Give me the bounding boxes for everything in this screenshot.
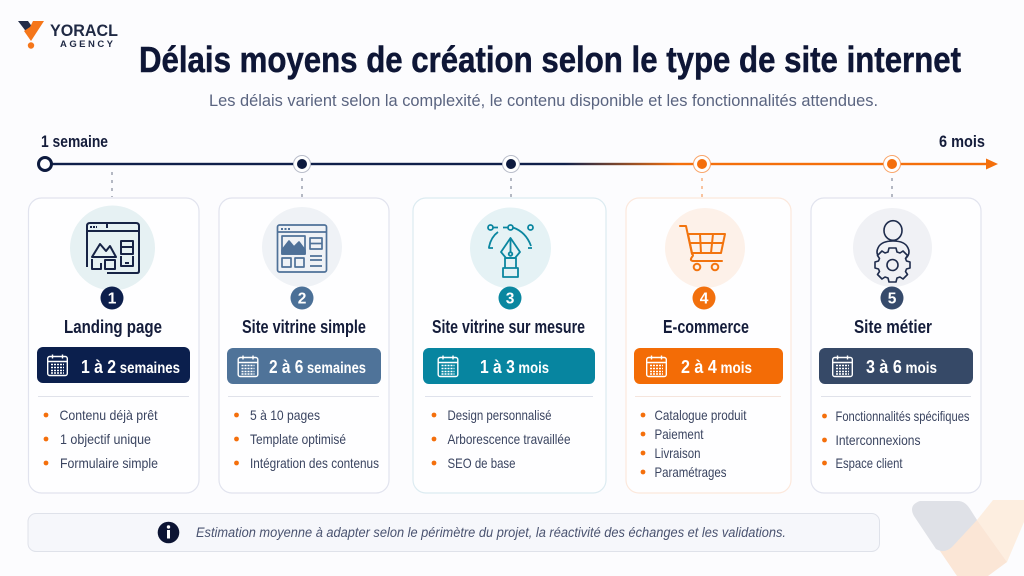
footer text: Estimation moyenne à adapter selon le périmètre du projet, la réactivité des échanges et les validations.	[196, 525, 786, 540]
timeline node 3	[502, 156, 520, 172]
logo: Yoracl Agency: AGENCY	[60, 39, 116, 50]
heading: site vitrine sur mesure: Site vitrine sur mesure	[432, 316, 585, 337]
icon: info	[158, 522, 179, 543]
timeline start label: 1 semaine	[41, 133, 108, 151]
feature list: 1 objectif unique	[60, 431, 151, 447]
feature list: Livraison	[654, 445, 700, 461]
subtitle: Les délais varient selon la complexité, le contenu disponible et les fonctionnalités attendues.	[209, 91, 878, 110]
panel: e-commerce	[626, 198, 791, 493]
footer note	[28, 514, 880, 552]
duration pill	[423, 348, 595, 384]
feature list	[44, 407, 158, 471]
timeline node 5	[884, 156, 900, 172]
heading: site métier: Site métier	[854, 316, 932, 337]
panel: site vitrine simple	[219, 198, 389, 493]
feature list: Fonctionnalités spécifiques	[836, 408, 970, 424]
timeline start node	[38, 158, 52, 170]
icon: landing page window	[70, 206, 155, 290]
step badge 5: 5	[888, 290, 897, 308]
icon: pen tool	[470, 208, 551, 288]
feature list: Arborescence travaillée	[448, 431, 571, 447]
feature list: Catalogue produit	[654, 407, 747, 423]
panel: site vitrine sur mesure	[413, 198, 606, 493]
step badge 4	[692, 286, 716, 310]
step badge 4: 4	[700, 290, 709, 308]
step badge 5	[880, 286, 904, 310]
panel: landing page	[28, 198, 199, 493]
duration pill	[227, 348, 381, 384]
step badge 2: 2	[298, 290, 306, 308]
step badge 3	[498, 286, 522, 310]
duration pill	[37, 347, 190, 383]
duration pill: 3 à 6 mois	[866, 356, 937, 377]
feature list: SEO de base	[448, 455, 516, 471]
duration pill: 2 à 4 mois	[681, 356, 752, 377]
feature list	[822, 408, 970, 471]
feature list	[641, 407, 747, 480]
icon: person with gear	[853, 208, 932, 287]
duration pill: 1 à 2 semaines	[81, 356, 180, 377]
feature list: Formulaire simple	[60, 455, 158, 471]
decorative logo watermark	[912, 500, 1024, 576]
icon: shopping cart	[665, 208, 745, 288]
duration pill: 2 à 6 semaines	[269, 356, 366, 377]
feature list: Paiement	[654, 426, 704, 442]
timeline axis	[50, 163, 990, 165]
feature list: Contenu déjà prêt	[60, 407, 158, 423]
feature list	[234, 407, 379, 471]
icon: website template	[262, 207, 342, 287]
logo: Yoracl Agency: YORACL	[50, 21, 118, 40]
feature list: Paramétrages	[654, 464, 726, 480]
timeline	[38, 133, 998, 172]
feature list: Intégration des contenus	[250, 455, 379, 471]
feature list: 5 à 10 pages	[250, 407, 320, 423]
duration pill	[819, 348, 973, 384]
panel: site métier	[811, 198, 981, 493]
step badge 3: 3	[506, 290, 515, 308]
feature list: Interconnexions	[836, 432, 920, 448]
feature list: Template optimisé	[250, 431, 346, 447]
duration pill	[634, 348, 783, 384]
step badge 2	[290, 286, 314, 310]
heading: e-commerce: E-commerce	[663, 316, 749, 337]
connector dashes	[112, 172, 892, 197]
duration pill: 1 à 3 mois	[480, 356, 549, 377]
step badge 1	[100, 286, 124, 310]
feature list: Espace client	[836, 455, 903, 471]
timeline node 4	[694, 156, 710, 172]
heading: landing page: Landing page	[64, 316, 162, 337]
logo: Yoracl Agency	[18, 21, 118, 50]
timeline node 2	[294, 156, 310, 172]
heading: site vitrine simple: Site vitrine simple	[242, 316, 366, 337]
timeline end label: 6 mois	[939, 133, 985, 151]
step badge 1: 1	[108, 290, 117, 308]
feature list: Design personnalisé	[448, 407, 552, 423]
feature list	[432, 407, 571, 471]
timeline arrowhead	[986, 158, 998, 170]
